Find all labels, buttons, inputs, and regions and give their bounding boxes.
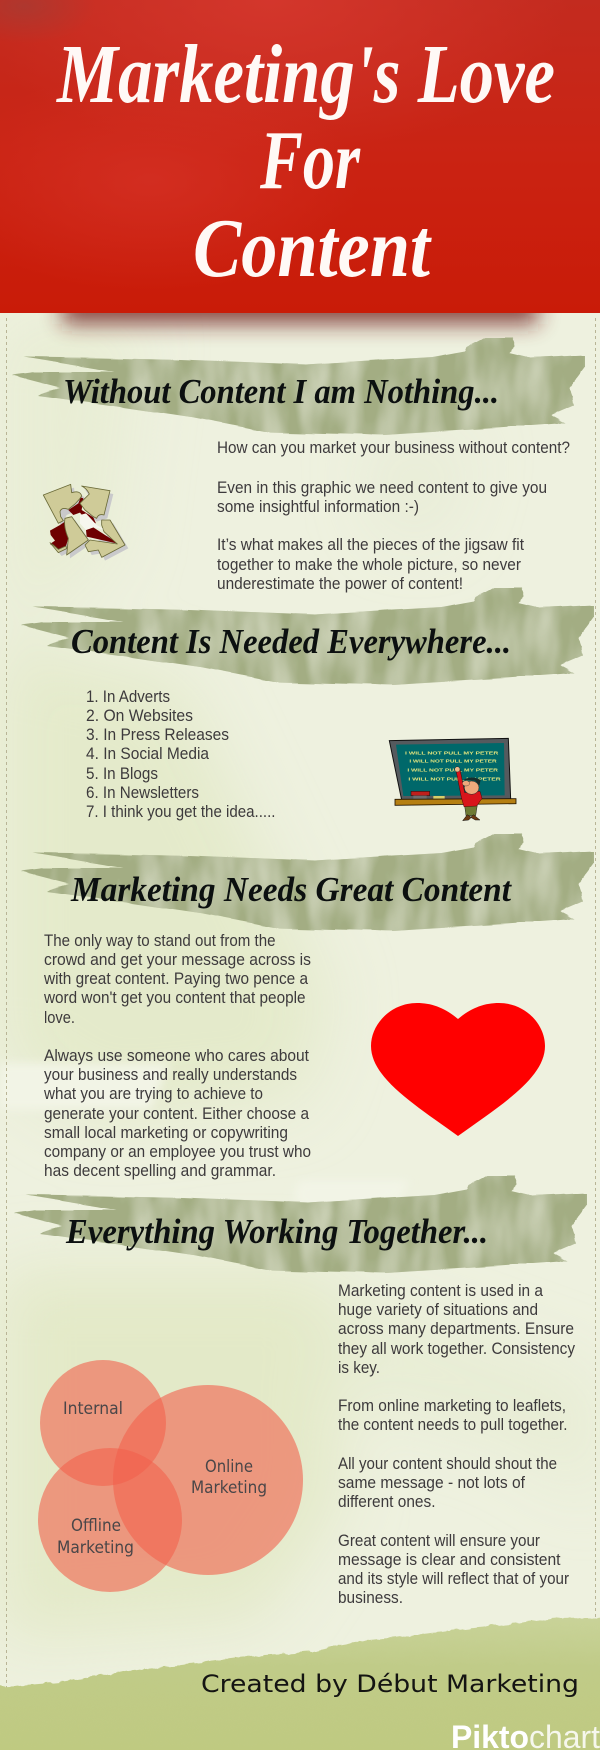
venn circle: internal — [40, 1360, 166, 1486]
venn circle: online marketing — [113, 1385, 303, 1575]
text block: great content: with great content. Paying two pence a — [43, 970, 309, 988]
text block: working together: and its style will reflect that of your — [338, 1570, 569, 1588]
brush stroke 3 — [20, 833, 594, 931]
text block: working together: different ones. — [338, 1493, 436, 1511]
text block: working together: message is clear and consistent — [338, 1551, 561, 1569]
footer band — [0, 1617, 600, 1750]
list: where content is needed: 2. On Websites — [86, 707, 193, 725]
icon: boy at blackboard: I WILL NOT PULL MY PETER — [408, 776, 502, 781]
text block: working together: they all work together. Consistency — [338, 1340, 576, 1358]
text block: great content: Always use someone who cares about — [44, 1047, 309, 1065]
brush stroke 2 — [20, 587, 594, 685]
text block: intro: some insightful information :-) — [217, 498, 419, 516]
list: where content is needed — [86, 688, 276, 821]
text block: great content: your business and really understands — [44, 1066, 297, 1084]
heading: marketing needs great content: Marketing Needs Great Content — [70, 870, 512, 909]
venn label: internal: Internal — [63, 1399, 123, 1419]
text block: great content: love. — [44, 1009, 75, 1027]
text block: working together: across many departments. Ensure — [338, 1320, 574, 1338]
venn label: online marketing — [191, 1457, 267, 1498]
text block: great content: word won't get you content that people — [43, 989, 305, 1007]
venn label: online marketing: Marketing — [191, 1478, 267, 1498]
text block: working together: is key. — [338, 1359, 380, 1377]
list: where content is needed: 1. In Adverts — [86, 688, 170, 706]
heading: everything working together: Everything Working Together... — [65, 1212, 488, 1251]
venn label: offline marketing: Marketing — [57, 1538, 134, 1558]
text block: intro: together to make the whole picture, so never — [217, 556, 521, 574]
icon: boy at blackboard: I WILL NOT PULL MY PETER — [407, 767, 499, 772]
text block: working together: same message - not lots of — [338, 1474, 525, 1492]
heading: content needed: Content Is Needed Everywhere... — [71, 622, 511, 661]
title: Content — [193, 202, 432, 295]
title: For — [259, 114, 361, 207]
list: where content is needed: 7. I think you get the idea..... — [86, 803, 276, 821]
text block: great content: company or an employee you trust who — [44, 1143, 311, 1161]
text block: working together: huge variety of situations and — [338, 1301, 538, 1319]
heading: without content: Without Content I am Nothing... — [63, 372, 499, 411]
list: where content is needed: 6. In Newsletters — [86, 784, 199, 802]
text block: working together: From online marketing to leaflets, — [338, 1397, 566, 1415]
text block: great content: what you are trying to achieve to — [43, 1085, 263, 1103]
text block: intro: Even in this graphic we need content to give you — [217, 479, 547, 497]
dashed page border — [6, 318, 596, 1690]
text block: great content — [43, 932, 311, 1180]
text block: working together: Marketing content is used in a — [338, 1282, 544, 1300]
venn label: offline marketing — [57, 1516, 134, 1558]
text block: working together — [338, 1282, 576, 1607]
icon: boy at blackboard: I WILL NOT PULL MY PETER — [405, 751, 500, 756]
text block: great content: crowd and get your message across is — [44, 951, 311, 969]
text block: intro — [217, 439, 570, 593]
venn circle: offline marketing — [38, 1448, 182, 1592]
text block: working together: business. — [338, 1589, 403, 1607]
icon: jigsaw — [43, 484, 128, 561]
brush stroke 1 — [11, 337, 585, 435]
text block: great content: The only way to stand out from the — [44, 932, 276, 950]
text block: working together: All your content should shout the — [338, 1455, 557, 1473]
text block: intro: How can you market your business without content? — [217, 439, 570, 457]
text block: intro: underestimate the power of content! — [217, 575, 463, 593]
icon: boy at blackboard: I WILL NOT PULL MY PETER — [409, 758, 498, 763]
list: where content is needed: 4. In Social Media — [86, 745, 210, 763]
icon: heart — [371, 1003, 545, 1136]
footer credit: Created by Début Marketing — [201, 1670, 579, 1698]
venn label: offline marketing: Offline — [71, 1516, 121, 1536]
venn diagram — [38, 1360, 303, 1592]
list: where content is needed: 3. In Press Releases — [86, 726, 229, 744]
text block: great content: has decent spelling and grammar. — [44, 1162, 276, 1180]
icon: boy at blackboard — [389, 738, 516, 821]
list: where content is needed: 5. In Blogs — [86, 765, 158, 783]
header shadow — [62, 290, 538, 324]
venn label: online marketing: Online — [205, 1457, 253, 1477]
text block: working together: the content needs to pull together. — [338, 1416, 568, 1434]
text block: working together: Great content will ensure your — [338, 1532, 540, 1550]
text block: great content: generate your content. Either choose a — [44, 1105, 310, 1123]
brush stroke 4 — [13, 1175, 587, 1273]
title — [55, 28, 555, 295]
text block: intro: It’s what makes all the pieces of the jigsaw fit — [217, 536, 524, 554]
header banner — [0, 0, 600, 313]
text block: great content: small local marketing or copywriting — [44, 1124, 288, 1142]
